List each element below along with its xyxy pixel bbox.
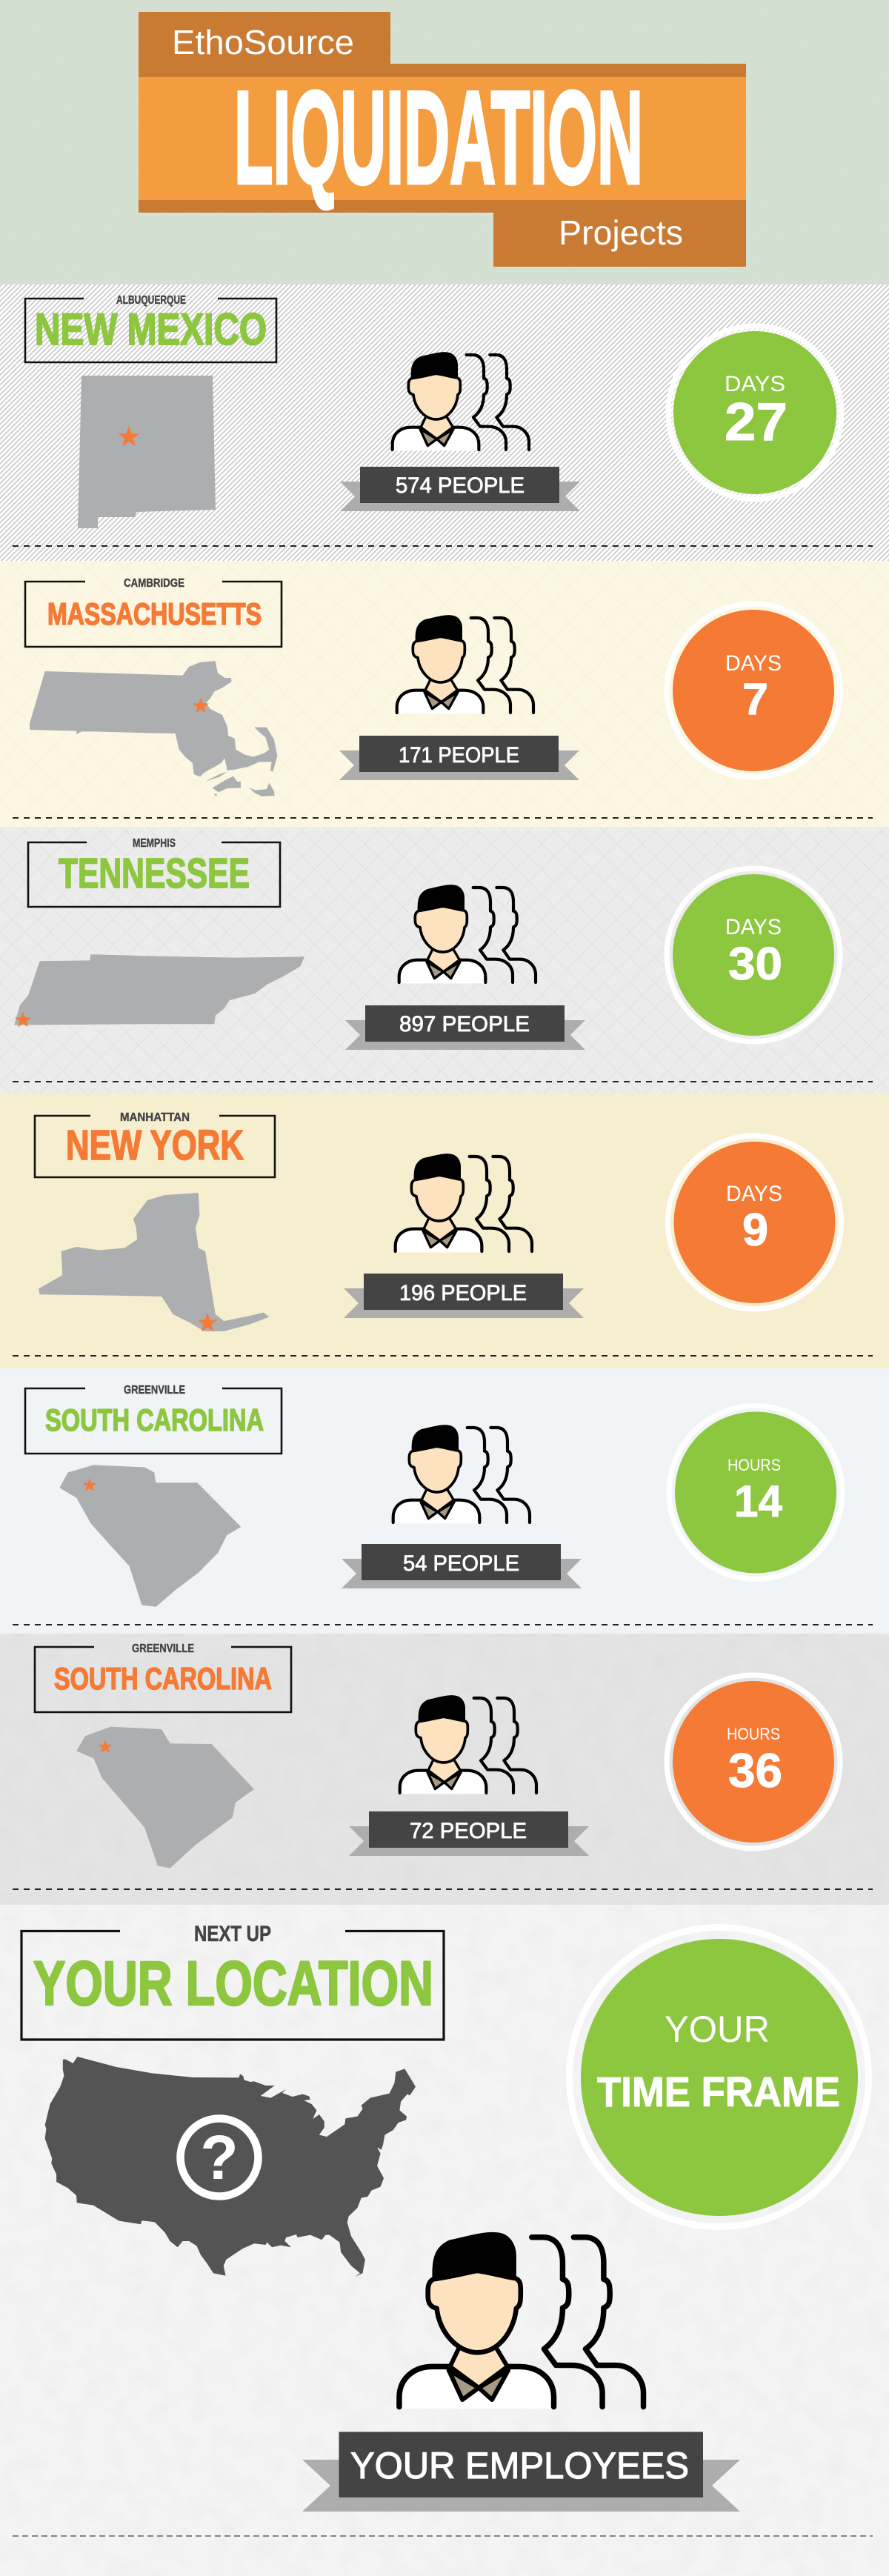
tab: EthoSource [139, 12, 390, 65]
icon: people [400, 1696, 536, 1794]
circle: your time frame [569, 1928, 868, 2227]
ribbon: your employees [302, 2432, 740, 2512]
ribbon: 574 people: 574 PEOPLE [396, 473, 525, 498]
title box: Manhattan, New York: NEW YORK [66, 1122, 244, 1169]
circle: your time frame: YOUR [665, 2008, 770, 2050]
ribbon: your employees: YOUR EMPLOYEES [350, 2445, 689, 2486]
title box: Albuquerque, New Mexico: ALBUQUERQUE [116, 294, 186, 307]
tab: Projects: Projects [559, 213, 683, 252]
ribbon: 72 people: 72 PEOPLE [410, 1819, 527, 1843]
panel: New York [0, 1094, 889, 1368]
title box: Manhattan, New York: MANHATTAN [120, 1111, 190, 1124]
circle: 30 days [667, 868, 840, 1042]
ribbon: 897 people [345, 1005, 585, 1050]
icon: people [393, 1425, 530, 1523]
title box: Manhattan, New York [35, 1111, 275, 1177]
circle: 27 days: DAYS [725, 372, 785, 396]
title box: Greenville, South Carolina [35, 1643, 291, 1712]
circle: your time frame: TIME FRAME [597, 2069, 840, 2116]
panel: header [0, 0, 889, 284]
title box: Memphis, Tennessee: TENNESSEE [59, 850, 250, 897]
circle: 9 days: 9 [742, 1205, 768, 1256]
title box: Memphis, Tennessee: MEMPHIS [133, 837, 176, 850]
icon: people [399, 2233, 644, 2409]
ribbon: 196 people [344, 1274, 584, 1318]
title box: Albuquerque, New Mexico [25, 294, 276, 362]
ribbon: 54 people [342, 1544, 582, 1588]
map: United States with question mark [45, 2057, 416, 2277]
circle: 30 days: 30 [728, 939, 782, 990]
circle: 7 days: DAYS [725, 651, 782, 676]
title box: Cambridge, Massachusetts [25, 577, 282, 647]
tab: EthoSource: EthoSource [172, 23, 354, 61]
title box: Greenville, South Carolina [25, 1384, 282, 1454]
title box: Next up, your location [21, 1922, 444, 2040]
tab: Projects [493, 200, 746, 267]
map: Massachusetts [30, 661, 277, 796]
title box: Next up, your location: NEXT UP [194, 1922, 271, 1946]
map: South Carolina [76, 1727, 254, 1868]
ribbon: 897 people: 897 PEOPLE [399, 1012, 530, 1036]
ribbon: 574 people [340, 467, 580, 511]
title box: Cambridge, Massachusetts: CAMBRIDGE [124, 577, 184, 590]
icon: people [399, 885, 536, 983]
icon: people [397, 616, 533, 713]
panel: New Mexico [0, 284, 889, 561]
icon: people [393, 353, 529, 450]
icon: people [396, 1154, 532, 1252]
title box: Greenville, South Carolina: GREENVILLE [124, 1384, 185, 1397]
panel: South Carolina, 14 hours [0, 1368, 889, 1634]
panel: Tennessee [0, 827, 889, 1094]
ribbon: 171 people: 171 PEOPLE [399, 743, 519, 768]
circle: 14 hours: HOURS [727, 1456, 781, 1474]
circle: 9 days: DAYS [726, 1182, 782, 1206]
ribbon: 196 people: 196 PEOPLE [399, 1281, 527, 1305]
panel: Massachusetts [0, 561, 889, 827]
ribbon: 171 people [339, 736, 579, 780]
circle: 30 days: DAYS [725, 915, 782, 939]
circle: 7 days: 7 [742, 674, 768, 724]
title box: Greenville, South Carolina: SOUTH CAROLINA [45, 1402, 264, 1437]
title banner: Liquidation [139, 64, 746, 213]
circle: 27 days: 27 [725, 393, 788, 452]
circle: 7 days [667, 604, 840, 777]
ribbon: 54 people: 54 PEOPLE [403, 1551, 519, 1576]
title box: Cambridge, Massachusetts: MASSACHUSETTS [47, 596, 262, 631]
circle: 36 hours: HOURS [727, 1725, 780, 1743]
map: South Carolina [59, 1465, 241, 1607]
circle: 14 hours [669, 1406, 842, 1580]
circle: 27 days [668, 326, 842, 499]
map: New Mexico [78, 376, 216, 528]
title box: Greenville, South Carolina: SOUTH CAROLINA [54, 1661, 272, 1696]
circle: 14 hours: 14 [734, 1477, 783, 1526]
circle: 36 hours: 36 [728, 1743, 782, 1797]
panel: your location [0, 1905, 889, 2576]
panel: South Carolina, 36 hours [0, 1634, 889, 1905]
circle: 36 hours [667, 1675, 840, 1848]
map: Tennessee [14, 954, 304, 1027]
circle: 9 days [668, 1136, 842, 1309]
ribbon: 72 people [349, 1811, 589, 1856]
title box: Greenville, South Carolina: GREENVILLE [132, 1643, 194, 1655]
map: United States with question mark: ? [200, 2123, 239, 2192]
title box: Albuquerque, New Mexico: NEW MEXICO [35, 304, 267, 354]
map: New York [39, 1193, 270, 1331]
title box: Next up, your location: YOUR LOCATION [33, 1948, 433, 2018]
title box: Memphis, Tennessee [28, 837, 280, 907]
